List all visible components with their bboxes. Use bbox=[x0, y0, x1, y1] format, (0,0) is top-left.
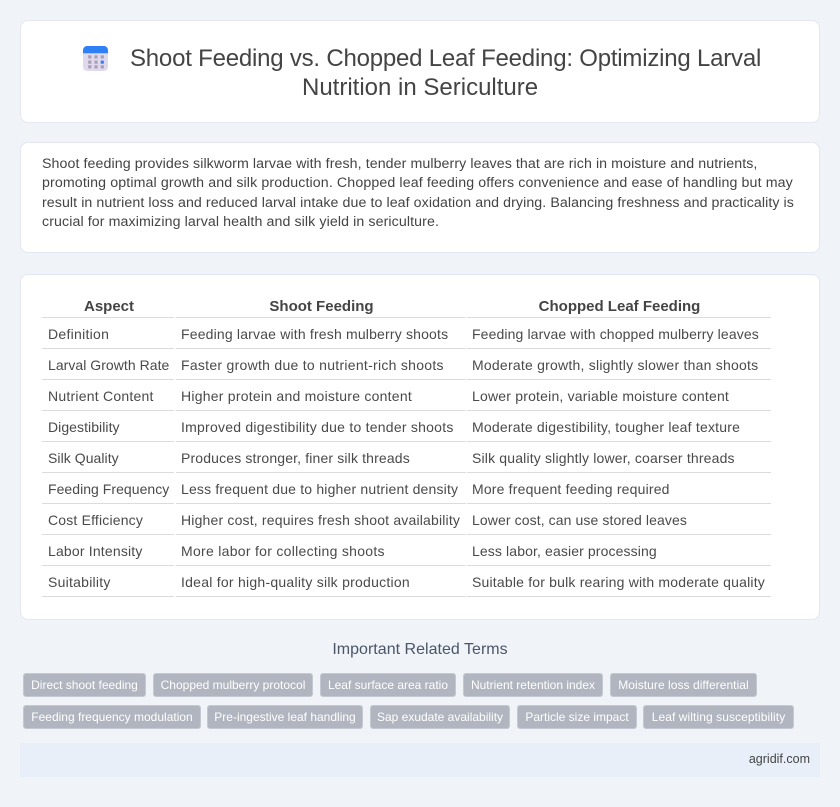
text block: introduction: crucial for maximizing larval health and silk yield in sericulture. bbox=[42, 214, 439, 230]
tag bbox=[23, 673, 146, 697]
row: Labor Intensity bbox=[48, 543, 657, 559]
row: Cost Efficiency: Higher cost, requires fresh shoot availability bbox=[181, 512, 460, 528]
footer: source: agridif.com bbox=[749, 752, 810, 766]
tags: related terms bbox=[23, 673, 794, 729]
row: Nutrient Content: Higher protein and moisture content bbox=[181, 388, 412, 404]
row: Labor Intensity: Less labor, easier processing bbox=[472, 543, 657, 559]
row: Suitability: Suitable for bulk rearing with moderate quality bbox=[472, 574, 765, 590]
row: Definition: Feeding larvae with fresh mulberry shoots bbox=[181, 326, 448, 342]
row: Suitability: Suitability bbox=[48, 574, 111, 590]
row: Silk Quality: Produces stronger, finer silk threads bbox=[181, 450, 410, 466]
row: Digestibility bbox=[48, 419, 740, 435]
row: Feeding Frequency bbox=[48, 481, 670, 497]
panel: title header bbox=[20, 20, 820, 123]
table header: Aspect bbox=[84, 298, 134, 315]
panel: comparison table bbox=[20, 274, 820, 620]
tag bbox=[463, 673, 603, 697]
row: Suitability: Ideal for high-quality silk production bbox=[181, 574, 410, 590]
row: Definition: Definition bbox=[48, 326, 109, 342]
title: Nutrition in Sericulture bbox=[302, 74, 538, 101]
row: Silk Quality: Silk Quality bbox=[48, 450, 119, 466]
tag bbox=[370, 705, 510, 729]
tag bbox=[23, 705, 201, 729]
title bbox=[130, 45, 761, 101]
title: Shoot Feeding vs. Chopped Leaf Feeding: Optimizing Larval bbox=[130, 45, 761, 72]
tag: Pre-ingestive leaf handling bbox=[214, 710, 356, 724]
row: Larval Growth Rate: Larval Growth Rate bbox=[48, 357, 169, 373]
heading: related terms: Important Related Terms bbox=[332, 641, 508, 658]
row: Larval Growth Rate: Faster growth due to nutrient-rich shoots bbox=[181, 357, 444, 373]
table header: Shoot Feeding bbox=[269, 298, 374, 315]
icon: calendar bbox=[83, 46, 108, 71]
text block: introduction bbox=[42, 156, 794, 230]
tag: Moisture loss differential bbox=[618, 678, 749, 692]
tag bbox=[643, 705, 794, 729]
row: Labor Intensity: Labor Intensity bbox=[48, 543, 143, 559]
table header bbox=[84, 298, 700, 315]
tag bbox=[153, 673, 313, 697]
row: Digestibility: Moderate digestibility, tougher leaf texture bbox=[472, 419, 740, 435]
tag: Chopped mulberry protocol bbox=[161, 678, 305, 692]
tag: Direct shoot feeding bbox=[31, 678, 138, 692]
tag: Leaf surface area ratio bbox=[328, 678, 448, 692]
row: Nutrient Content bbox=[48, 388, 729, 404]
row: Definition: Feeding larvae with chopped mulberry leaves bbox=[472, 326, 759, 342]
tag: Nutrient retention index bbox=[471, 678, 595, 692]
row: Suitability bbox=[48, 574, 765, 590]
row: Silk Quality bbox=[48, 450, 735, 466]
text block: introduction: promoting optimal growth and silk production. Chopped leaf feeding offers convenience and ease of handling but may bbox=[42, 175, 793, 191]
tag bbox=[610, 673, 757, 697]
row: Nutrient Content: Nutrient Content bbox=[48, 388, 154, 404]
row: Labor Intensity: More labor for collecting shoots bbox=[181, 543, 385, 559]
row: Digestibility: Improved digestibility due to tender shoots bbox=[181, 419, 454, 435]
tag: Leaf wilting susceptibility bbox=[652, 710, 785, 724]
text block: introduction: result in nutrient loss and reduced larval intake due to leaf oxidation and drying. Balancing freshness and practicality is bbox=[42, 195, 794, 211]
row: Larval Growth Rate bbox=[48, 357, 758, 373]
row: Cost Efficiency: Lower cost, can use stored leaves bbox=[472, 512, 687, 528]
row: Silk Quality: Silk quality slightly lower, coarser threads bbox=[472, 450, 735, 466]
tag: Feeding frequency modulation bbox=[31, 710, 193, 724]
tag bbox=[320, 673, 456, 697]
tag bbox=[517, 705, 637, 729]
row: Nutrient Content: Lower protein, variable moisture content bbox=[472, 388, 729, 404]
row: Definition bbox=[48, 326, 759, 342]
row: Feeding Frequency: Feeding Frequency bbox=[48, 481, 169, 497]
text block: introduction: Shoot feeding provides silkworm larvae with fresh, tender mulberry leaves that are rich in moisture and nutrients, bbox=[42, 156, 757, 172]
table header: Chopped Leaf Feeding bbox=[539, 298, 700, 315]
tag bbox=[207, 705, 363, 729]
row: Cost Efficiency bbox=[48, 512, 687, 528]
tag: Sap exudate availability bbox=[377, 710, 503, 724]
row: Larval Growth Rate: Moderate growth, slightly slower than shoots bbox=[472, 357, 758, 373]
row: Feeding Frequency: Less frequent due to higher nutrient density bbox=[181, 481, 458, 497]
row: Feeding Frequency: More frequent feeding required bbox=[472, 481, 670, 497]
row: Digestibility: Digestibility bbox=[48, 419, 120, 435]
tag: Particle size impact bbox=[525, 710, 629, 724]
row: Cost Efficiency: Cost Efficiency bbox=[48, 512, 143, 528]
panel: introduction bbox=[20, 142, 820, 253]
footer bbox=[20, 743, 820, 777]
